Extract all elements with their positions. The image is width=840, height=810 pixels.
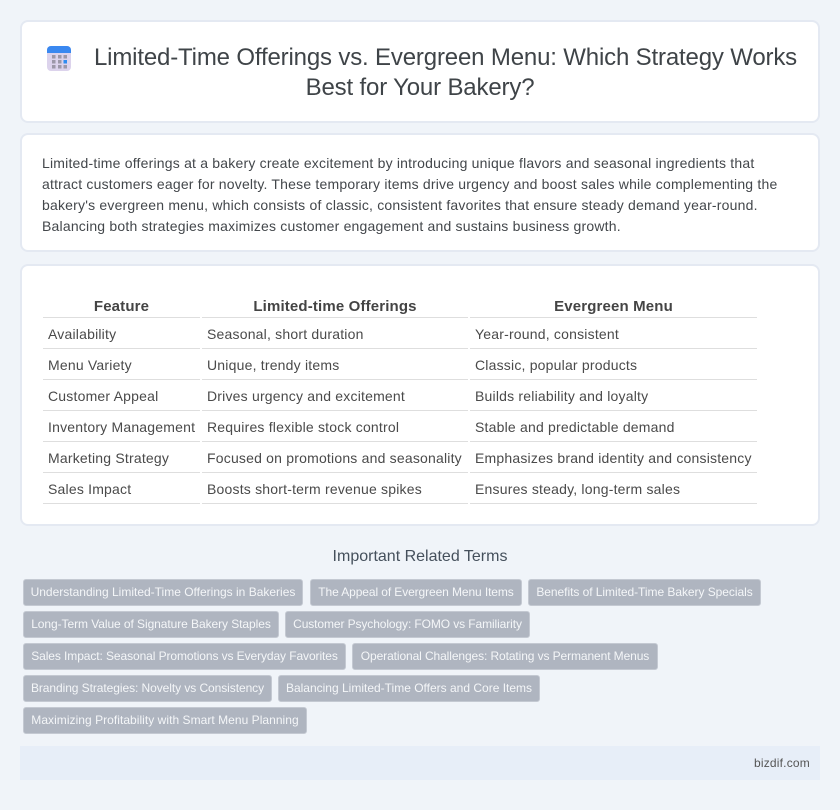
comparison table: Customer Appeal bbox=[48, 388, 158, 404]
related terms tags: Understanding Limited-Time Offerings in Bakeries bbox=[31, 585, 295, 599]
panel: comparison table bbox=[20, 264, 820, 526]
panel: introduction bbox=[20, 133, 820, 252]
header: Limited-time Offerings: Limited-time Offerings bbox=[253, 298, 417, 315]
comparison table: Builds reliability and loyalty bbox=[475, 388, 648, 404]
comparison table: Ensures steady, long-term sales bbox=[475, 481, 680, 497]
intro text: Balancing both strategies maximizes customer engagement and sustains business growth. bbox=[42, 218, 621, 234]
header: Feature: Feature bbox=[94, 298, 149, 315]
intro text: attract customers eager for novelty. These temporary items drive urgency and boost sales while complementing the bbox=[42, 176, 777, 192]
footer bbox=[20, 746, 820, 780]
comparison table: Unique, trendy items bbox=[207, 357, 339, 373]
comparison table bbox=[43, 298, 757, 504]
intro text: bakery's evergreen menu, which consists of classic, consistent favorites that ensure steady demand year-round. bbox=[42, 197, 758, 213]
panel: title header bbox=[20, 20, 820, 123]
comparison table: Availability bbox=[48, 326, 116, 342]
title bbox=[94, 44, 797, 101]
comparison table: Classic, popular products bbox=[475, 357, 637, 373]
related terms tags: Benefits of Limited-Time Bakery Specials bbox=[536, 585, 753, 599]
related terms tags: Sales Impact: Seasonal Promotions vs Everyday Favorites bbox=[31, 649, 338, 663]
title: Best for Your Bakery? bbox=[306, 74, 534, 101]
comparison table: Stable and predictable demand bbox=[475, 419, 675, 435]
related terms tags: Maximizing Profitability with Smart Menu Planning bbox=[31, 713, 299, 727]
related terms tags: The Appeal of Evergreen Menu Items bbox=[318, 585, 514, 599]
related terms tags: Operational Challenges: Rotating vs Permanent Menus bbox=[361, 649, 649, 663]
icon: calendar bbox=[47, 46, 71, 71]
related terms tags bbox=[23, 579, 761, 734]
footer text: bizdif.com bbox=[754, 756, 810, 770]
header: Evergreen Menu: Evergreen Menu bbox=[554, 298, 673, 315]
comparison table: Emphasizes brand identity and consistency bbox=[475, 450, 752, 466]
title: Limited-Time Offerings vs. Evergreen Menu: Which Strategy Works bbox=[94, 44, 797, 71]
intro text bbox=[42, 155, 777, 234]
comparison table: Year-round, consistent bbox=[475, 326, 619, 342]
comparison table: Drives urgency and excitement bbox=[207, 388, 405, 404]
comparison table: Boosts short-term revenue spikes bbox=[207, 481, 422, 497]
comparison table: Focused on promotions and seasonality bbox=[207, 450, 462, 466]
comparison table: Sales Impact bbox=[48, 481, 131, 497]
comparison table: Marketing Strategy bbox=[48, 450, 169, 466]
related terms tags: Balancing Limited-Time Offers and Core Items bbox=[286, 681, 532, 695]
comparison table: Seasonal, short duration bbox=[207, 326, 364, 342]
related terms tags: Customer Psychology: FOMO vs Familiarity bbox=[293, 617, 522, 631]
intro text: Limited-time offerings at a bakery create excitement by introducing unique flavors and seasonal ingredients that bbox=[42, 155, 754, 171]
comparison table: Inventory Management bbox=[48, 419, 195, 435]
heading: related terms: Important Related Terms bbox=[333, 548, 507, 565]
related terms tags: Branding Strategies: Novelty vs Consistency bbox=[31, 681, 264, 695]
related terms tags: Long-Term Value of Signature Bakery Staples bbox=[31, 617, 271, 631]
comparison table: Requires flexible stock control bbox=[207, 419, 399, 435]
comparison table: Menu Variety bbox=[48, 357, 132, 373]
